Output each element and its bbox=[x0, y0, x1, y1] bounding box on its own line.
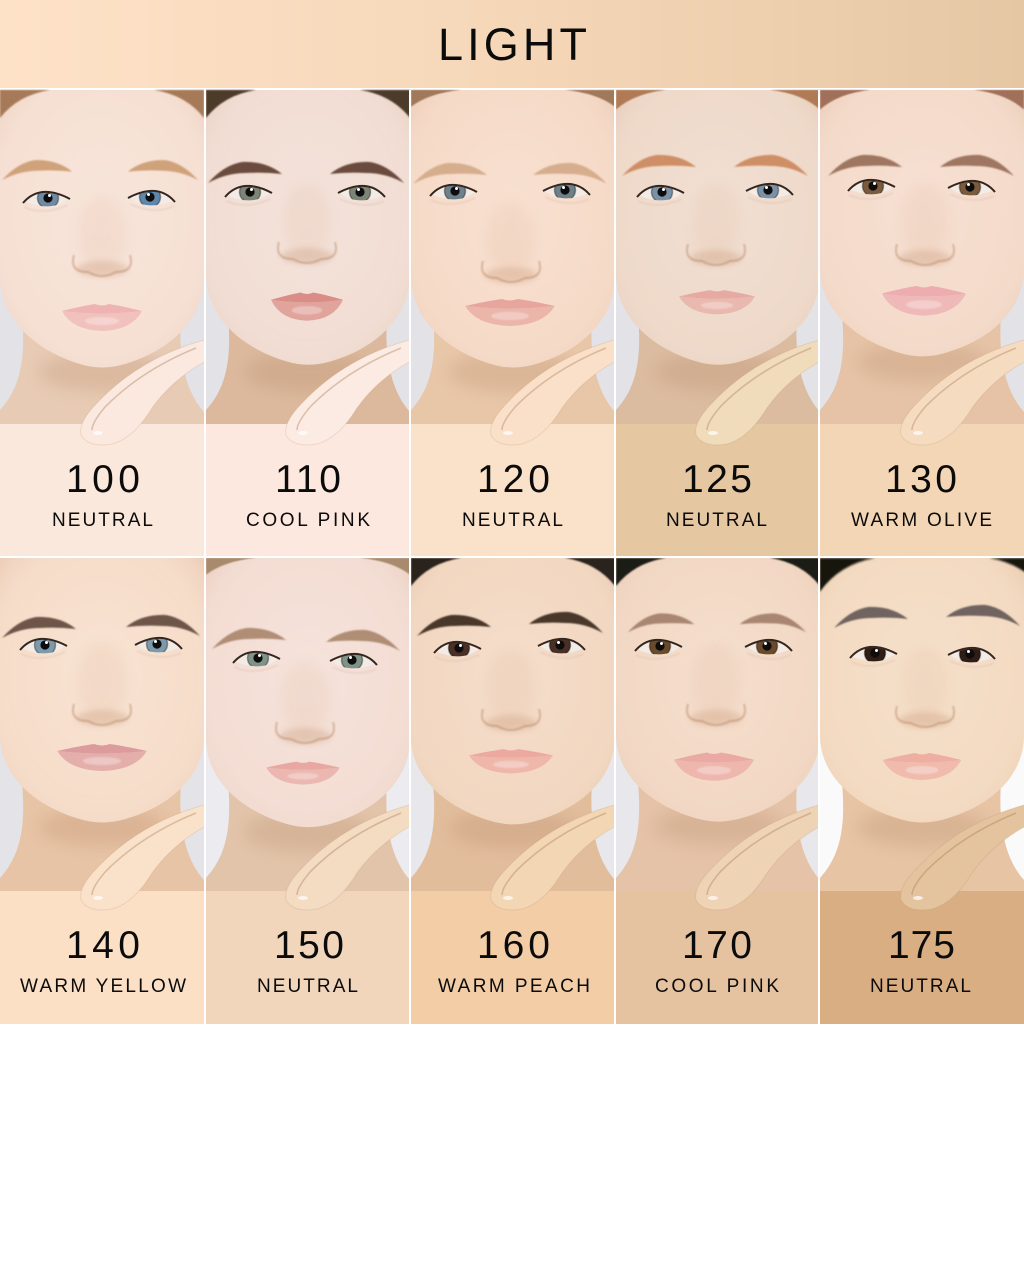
shade name 170: COOL PINK bbox=[655, 976, 779, 997]
shade name 160: WARM PEACH bbox=[438, 976, 590, 997]
panel: shade 160 bbox=[411, 558, 615, 1024]
panel: shade 120 bbox=[411, 90, 615, 556]
shade number 130: 130 bbox=[885, 458, 957, 501]
swatch 150 bbox=[206, 891, 409, 1024]
swatch 100 bbox=[0, 424, 204, 556]
shade number 110: 110 bbox=[275, 458, 341, 501]
product smear 130 bbox=[901, 340, 1024, 445]
portrait 175 bbox=[820, 558, 1024, 892]
product smear 140 bbox=[81, 805, 204, 910]
shade name 140: WARM YELLOW bbox=[20, 976, 186, 997]
shade number 170: 170 bbox=[682, 924, 752, 967]
portrait 100 bbox=[0, 90, 204, 424]
shade number 140: 140 bbox=[66, 924, 140, 967]
shade number 175: 175 bbox=[888, 924, 955, 967]
shade name 110: COOL PINK bbox=[246, 510, 370, 531]
infographic: light foundation shades bbox=[0, 0, 1024, 1024]
swatch 130 bbox=[820, 424, 1024, 556]
swatch 120 bbox=[411, 424, 614, 556]
swatch 170 bbox=[616, 891, 819, 1024]
panel: shade 175 bbox=[820, 558, 1024, 1024]
shade number 160: 160 bbox=[477, 924, 550, 967]
shade number 100: 100 bbox=[66, 458, 140, 501]
swatch 125 bbox=[616, 424, 819, 556]
swatch 110 bbox=[206, 424, 409, 556]
panel: shade 170 bbox=[616, 558, 820, 1024]
product smear 100 bbox=[81, 340, 204, 445]
product smear 170 bbox=[696, 805, 819, 910]
product smear 175 bbox=[901, 805, 1024, 910]
shade name 100: NEUTRAL bbox=[52, 510, 153, 531]
portrait 170 bbox=[616, 558, 820, 892]
portrait 120 bbox=[411, 90, 615, 424]
product smear 160 bbox=[491, 805, 614, 910]
swatch 140 bbox=[0, 891, 204, 1024]
header band bbox=[0, 0, 1024, 88]
portrait 160 bbox=[411, 558, 615, 892]
shade name 130: WARM OLIVE bbox=[851, 510, 992, 531]
shade number 125: 125 bbox=[682, 458, 752, 501]
shade name 125: NEUTRAL bbox=[666, 510, 767, 531]
shade number 120: 120 bbox=[477, 458, 550, 501]
panel: shade 100 bbox=[0, 90, 204, 556]
panel: shade 110 bbox=[206, 90, 410, 556]
portrait 150 bbox=[206, 558, 410, 892]
portrait 130 bbox=[820, 90, 1024, 424]
shade name 150: NEUTRAL bbox=[257, 976, 358, 997]
panel: shade 150 bbox=[206, 558, 410, 1024]
shade number 150: 150 bbox=[274, 924, 344, 967]
swatch 175 bbox=[820, 891, 1024, 1024]
portrait 110 bbox=[206, 90, 410, 424]
title: LIGHT bbox=[438, 19, 587, 70]
product smear 125 bbox=[696, 340, 819, 445]
portrait 140 bbox=[0, 558, 204, 892]
portrait 125 bbox=[616, 90, 820, 424]
panel: shade 125 bbox=[616, 90, 820, 556]
product smear 120 bbox=[491, 340, 614, 445]
swatch 160 bbox=[411, 891, 614, 1024]
panel: shade 140 bbox=[0, 558, 204, 1024]
product smear 150 bbox=[286, 805, 409, 910]
product smear 110 bbox=[286, 340, 409, 445]
panel: shade 130 bbox=[820, 90, 1024, 556]
shade name 120: NEUTRAL bbox=[462, 510, 563, 531]
shade name 175: NEUTRAL bbox=[870, 976, 971, 997]
